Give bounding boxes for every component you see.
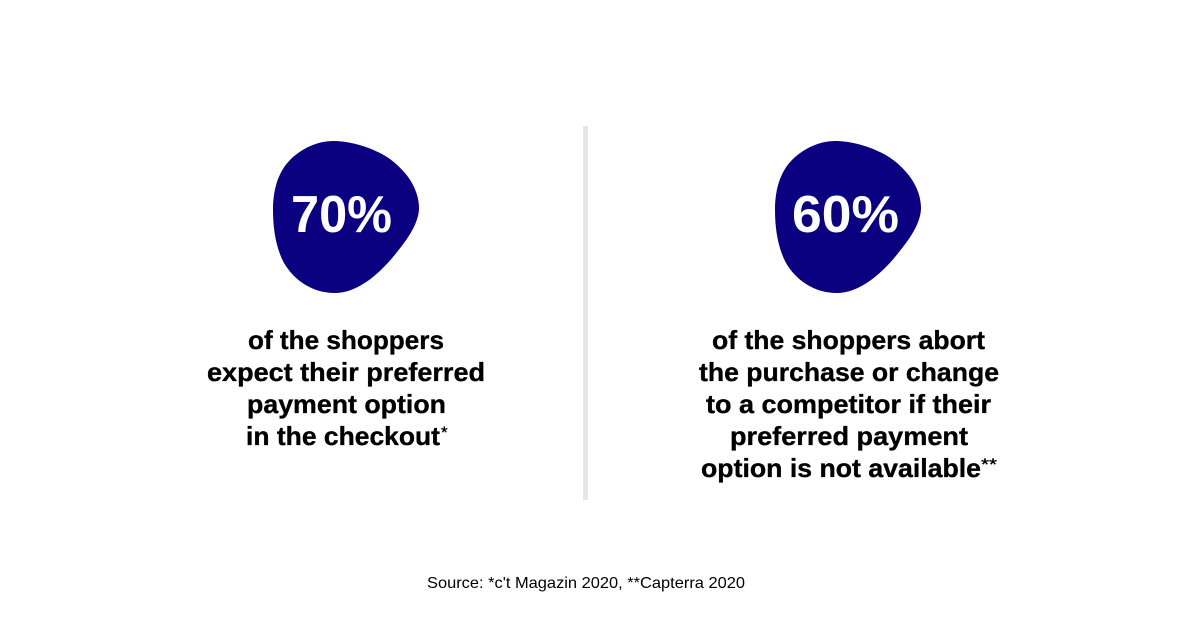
right description: preferred payment bbox=[730, 421, 968, 451]
left description: expect their preferred bbox=[207, 357, 485, 387]
stat blob: 70% bbox=[273, 141, 419, 293]
left description bbox=[207, 325, 485, 450]
right description: the purchase or change bbox=[699, 357, 999, 387]
left description: * bbox=[441, 423, 448, 442]
divider bbox=[583, 126, 588, 500]
stat blob: 60% bbox=[775, 141, 921, 293]
right description: of the shoppers abort bbox=[712, 325, 985, 355]
right description: ** bbox=[981, 455, 997, 474]
right description bbox=[699, 325, 999, 483]
right description: option is not available bbox=[701, 453, 981, 483]
source note: Source: *c't Magazin 2020, **Capterra 2020 bbox=[427, 575, 745, 592]
left description: of the shoppers bbox=[248, 325, 444, 355]
stat blob: 70%: 70% bbox=[291, 186, 392, 244]
left description: payment option bbox=[247, 389, 446, 419]
right description: to a competitor if their bbox=[706, 389, 991, 419]
stat blob: 60%: 60% bbox=[792, 186, 899, 244]
